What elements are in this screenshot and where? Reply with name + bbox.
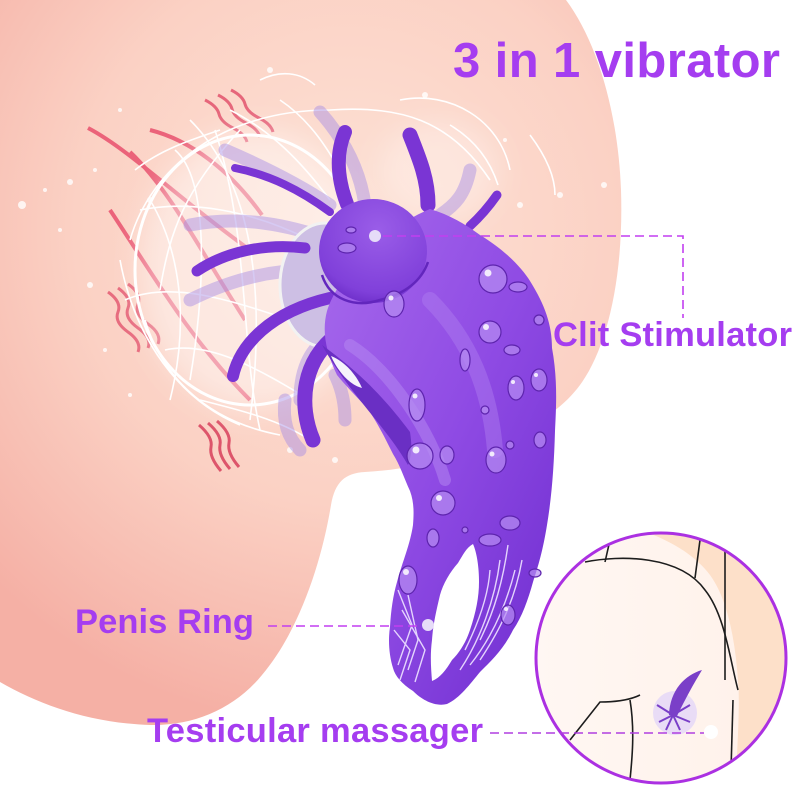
small device [653,670,702,735]
leader line: testicular massager [490,725,718,739]
water splash [120,74,555,440]
label: clit stimulator: Clit Stimulator [553,316,792,354]
leader line: penis ring [268,619,434,631]
water droplets scatter [18,67,607,463]
water streaks on ring [394,545,522,682]
label: testicular massager: Testicular massager [147,712,483,750]
main body [325,209,556,705]
ball seam [322,262,428,303]
panel: usage inset [536,530,800,790]
metal gap with dark lip [322,345,411,465]
label: penis ring: Penis Ring [75,603,254,641]
silver disc [280,223,370,347]
droplet highlights [388,270,538,611]
droplets on device [338,227,547,625]
icon: heat waves upper [205,90,273,142]
leader line: clit stimulator [369,230,683,318]
faded motion tentacles [190,112,470,450]
body highlight [430,300,495,450]
red heat lines [88,128,262,400]
device: clit stimulator and penis ring [197,132,556,705]
neutral contour lines [570,540,738,780]
ball head [319,199,427,303]
peach band [653,534,784,756]
icon: heat waves left [108,284,159,352]
icon: heat waves lower [199,421,239,471]
background: pink body shape [0,0,621,725]
title: 3 in 1 vibrator [453,34,780,88]
tentacles [197,132,497,440]
